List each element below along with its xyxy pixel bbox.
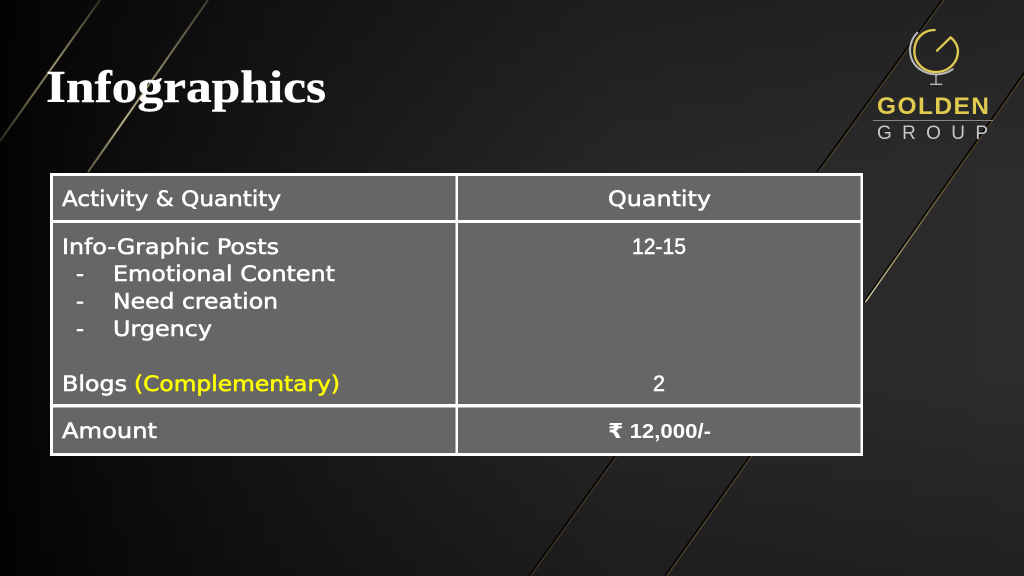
activity list: - bbox=[76, 262, 84, 286]
amount value: ₹ 12,000/- bbox=[608, 420, 711, 443]
table grid and cell fills bbox=[50, 173, 863, 456]
activity list: - bbox=[76, 290, 84, 314]
activity list bbox=[62, 235, 335, 341]
activity list: Emotional Content bbox=[113, 262, 335, 286]
icon: globe with G bbox=[910, 30, 958, 84]
activity list: Need creation bbox=[113, 290, 278, 314]
activity list: Info-Graphic Posts bbox=[62, 235, 279, 259]
activity list: Urgency bbox=[113, 317, 212, 341]
quantity: blogs: 2 bbox=[653, 371, 665, 396]
logo wordmark: GROUP: GROUP bbox=[877, 123, 988, 144]
title: Infographics bbox=[46, 62, 326, 112]
activity list: - bbox=[76, 317, 84, 341]
blogs row label: (Complementary) bbox=[134, 372, 340, 396]
logo wordmark: GOLDEN: GOLDEN bbox=[877, 93, 989, 120]
blogs row label bbox=[62, 372, 340, 396]
header: Activity & Quantity: Activity & Quantity bbox=[62, 187, 281, 211]
blogs row label: Blogs bbox=[62, 372, 127, 396]
header: Quantity: Quantity bbox=[608, 187, 711, 211]
amount label: Amount bbox=[62, 419, 157, 443]
logo: Golden Group bbox=[873, 30, 993, 144]
quantity: info-graphic posts: 12-15 bbox=[632, 234, 686, 259]
pricing table bbox=[50, 173, 863, 456]
